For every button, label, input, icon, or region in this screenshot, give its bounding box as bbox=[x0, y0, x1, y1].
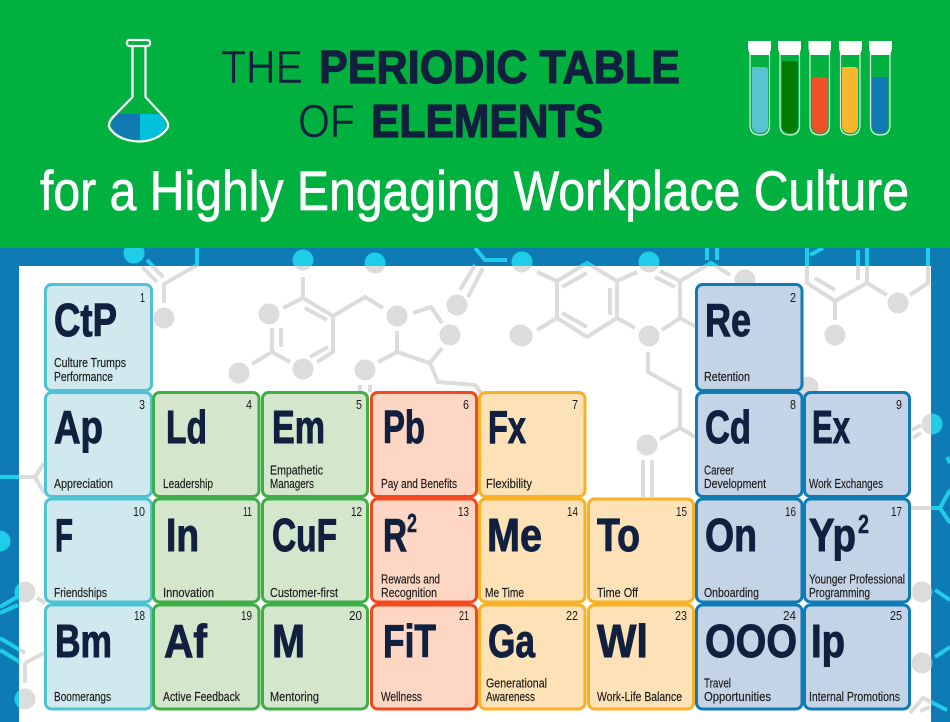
name bbox=[704, 676, 771, 704]
name: Friendships bbox=[54, 586, 107, 600]
header band bbox=[0, 0, 950, 248]
symbol: Em bbox=[272, 401, 325, 453]
symbol: Ip bbox=[811, 615, 845, 667]
number: 16 bbox=[785, 504, 796, 519]
name: Career bbox=[704, 464, 734, 478]
name: Onboarding bbox=[704, 586, 759, 600]
title line 1: PERIODIC TABLE bbox=[319, 41, 680, 93]
cell: M bbox=[262, 605, 368, 709]
number: 23 bbox=[675, 608, 687, 623]
cell: FiT bbox=[372, 605, 476, 709]
symbol: M bbox=[272, 615, 305, 667]
name bbox=[54, 356, 126, 384]
icon: test tubes bbox=[748, 41, 892, 135]
name: Active Feedback bbox=[163, 690, 241, 704]
name: Younger Professional bbox=[809, 572, 905, 586]
number: 17 bbox=[891, 504, 902, 519]
symbol: 2 bbox=[407, 508, 417, 538]
number: 1 bbox=[140, 290, 145, 305]
symbol: CuF bbox=[272, 509, 337, 561]
symbol: Af bbox=[164, 615, 208, 667]
symbol: On bbox=[705, 509, 757, 561]
number: 20 bbox=[349, 608, 362, 623]
icon: flask bbox=[109, 40, 168, 142]
number: 22 bbox=[566, 608, 578, 623]
number: 6 bbox=[463, 397, 469, 412]
title line 1: THE bbox=[221, 41, 303, 93]
name: Flexibility bbox=[486, 477, 533, 491]
name: Appreciation bbox=[54, 477, 113, 491]
name bbox=[381, 572, 440, 600]
name: Opportunities bbox=[704, 690, 771, 704]
name: Development bbox=[704, 477, 766, 491]
cell: Ap bbox=[46, 392, 152, 496]
cell: OOO bbox=[696, 605, 802, 709]
cell: Pb bbox=[372, 392, 476, 496]
number: 7 bbox=[572, 397, 578, 412]
name: Retention bbox=[704, 370, 750, 384]
number: 19 bbox=[241, 608, 252, 623]
symbol: OOO bbox=[705, 615, 797, 667]
name bbox=[270, 464, 323, 491]
number: 10 bbox=[133, 504, 145, 519]
number: 5 bbox=[356, 397, 362, 412]
cell: Ga bbox=[480, 605, 585, 709]
name: Awareness bbox=[486, 690, 535, 704]
name: Work-Life Balance bbox=[597, 690, 682, 704]
cell: On bbox=[696, 499, 802, 602]
number: 13 bbox=[458, 504, 469, 519]
blue frame bbox=[0, 248, 950, 722]
cell: Bm bbox=[46, 605, 152, 709]
symbol: Wl bbox=[597, 615, 648, 667]
name: Generational bbox=[486, 676, 547, 690]
symbol: R bbox=[383, 509, 407, 561]
cell: CuF bbox=[262, 499, 368, 602]
cell: Ex bbox=[804, 392, 910, 496]
number: 4 bbox=[246, 397, 252, 412]
symbol: Ap bbox=[54, 401, 103, 453]
number: 24 bbox=[783, 608, 796, 623]
symbol: Yp bbox=[809, 509, 856, 561]
cell: Em bbox=[262, 392, 368, 496]
symbol: CtP bbox=[54, 294, 117, 346]
cell: Ld bbox=[154, 392, 259, 496]
number: 9 bbox=[896, 397, 902, 412]
symbol: Ga bbox=[488, 615, 535, 667]
symbol: Pb bbox=[383, 401, 425, 453]
cell: Re bbox=[696, 284, 802, 390]
cell: Af bbox=[154, 605, 259, 709]
number: 8 bbox=[790, 397, 796, 412]
name: Rewards and bbox=[381, 572, 440, 586]
number: 15 bbox=[676, 504, 687, 519]
name: Wellness bbox=[381, 690, 422, 704]
molecule background bbox=[0, 243, 950, 713]
number: 2 bbox=[790, 290, 796, 305]
name: Leadership bbox=[163, 477, 213, 491]
symbol: Cd bbox=[705, 401, 751, 453]
cell: To bbox=[588, 499, 694, 602]
symbol: 2 bbox=[858, 509, 869, 539]
name: Recognition bbox=[381, 586, 437, 600]
name: Customer-first bbox=[270, 586, 338, 600]
number: 3 bbox=[139, 397, 145, 412]
name: Performance bbox=[54, 370, 113, 384]
cell: Cd bbox=[696, 392, 802, 496]
cell: Yp2 bbox=[804, 499, 910, 602]
title line 2: OF bbox=[298, 95, 355, 147]
symbol: Fx bbox=[488, 401, 526, 453]
symbol: FiT bbox=[383, 615, 436, 667]
number: 21 bbox=[459, 608, 469, 623]
name bbox=[704, 464, 766, 491]
cell: CtP bbox=[46, 284, 152, 390]
cell: Ip bbox=[804, 605, 910, 709]
symbol: In bbox=[166, 509, 199, 561]
symbol: Ex bbox=[812, 401, 850, 453]
name: Managers bbox=[270, 477, 314, 491]
name: Innovation bbox=[163, 586, 214, 600]
number: 25 bbox=[890, 608, 902, 623]
symbol: To bbox=[597, 509, 640, 561]
symbol: F bbox=[55, 509, 73, 561]
symbol: Ld bbox=[166, 401, 207, 453]
name: Me Time bbox=[485, 586, 524, 600]
name bbox=[809, 572, 905, 600]
cell: Fx bbox=[480, 392, 585, 496]
title line 2: ELEMENTS bbox=[371, 95, 603, 147]
number: 14 bbox=[567, 504, 578, 519]
name: Time Off bbox=[597, 586, 638, 600]
number: 11 bbox=[243, 504, 252, 519]
name: Mentoring bbox=[270, 690, 319, 704]
cell: In bbox=[154, 499, 259, 602]
cell: F bbox=[46, 499, 152, 602]
name: Internal Promotions bbox=[809, 690, 900, 704]
number: 12 bbox=[351, 504, 362, 519]
name: Work Exchanges bbox=[809, 477, 883, 491]
symbol: Bm bbox=[55, 615, 112, 667]
name: Boomerangs bbox=[54, 690, 111, 704]
cell: Me bbox=[480, 499, 585, 602]
number: 18 bbox=[134, 608, 145, 623]
cell: Wl bbox=[588, 605, 694, 709]
cell: R2 bbox=[372, 499, 476, 602]
name: Culture Trumps bbox=[54, 356, 126, 370]
name: Travel bbox=[704, 676, 731, 690]
name: Programming bbox=[809, 586, 870, 600]
name: Empathetic bbox=[270, 464, 323, 478]
name bbox=[486, 676, 547, 704]
symbol: Me bbox=[487, 509, 542, 561]
symbol: Re bbox=[705, 294, 751, 346]
name: Pay and Benefits bbox=[381, 477, 457, 491]
